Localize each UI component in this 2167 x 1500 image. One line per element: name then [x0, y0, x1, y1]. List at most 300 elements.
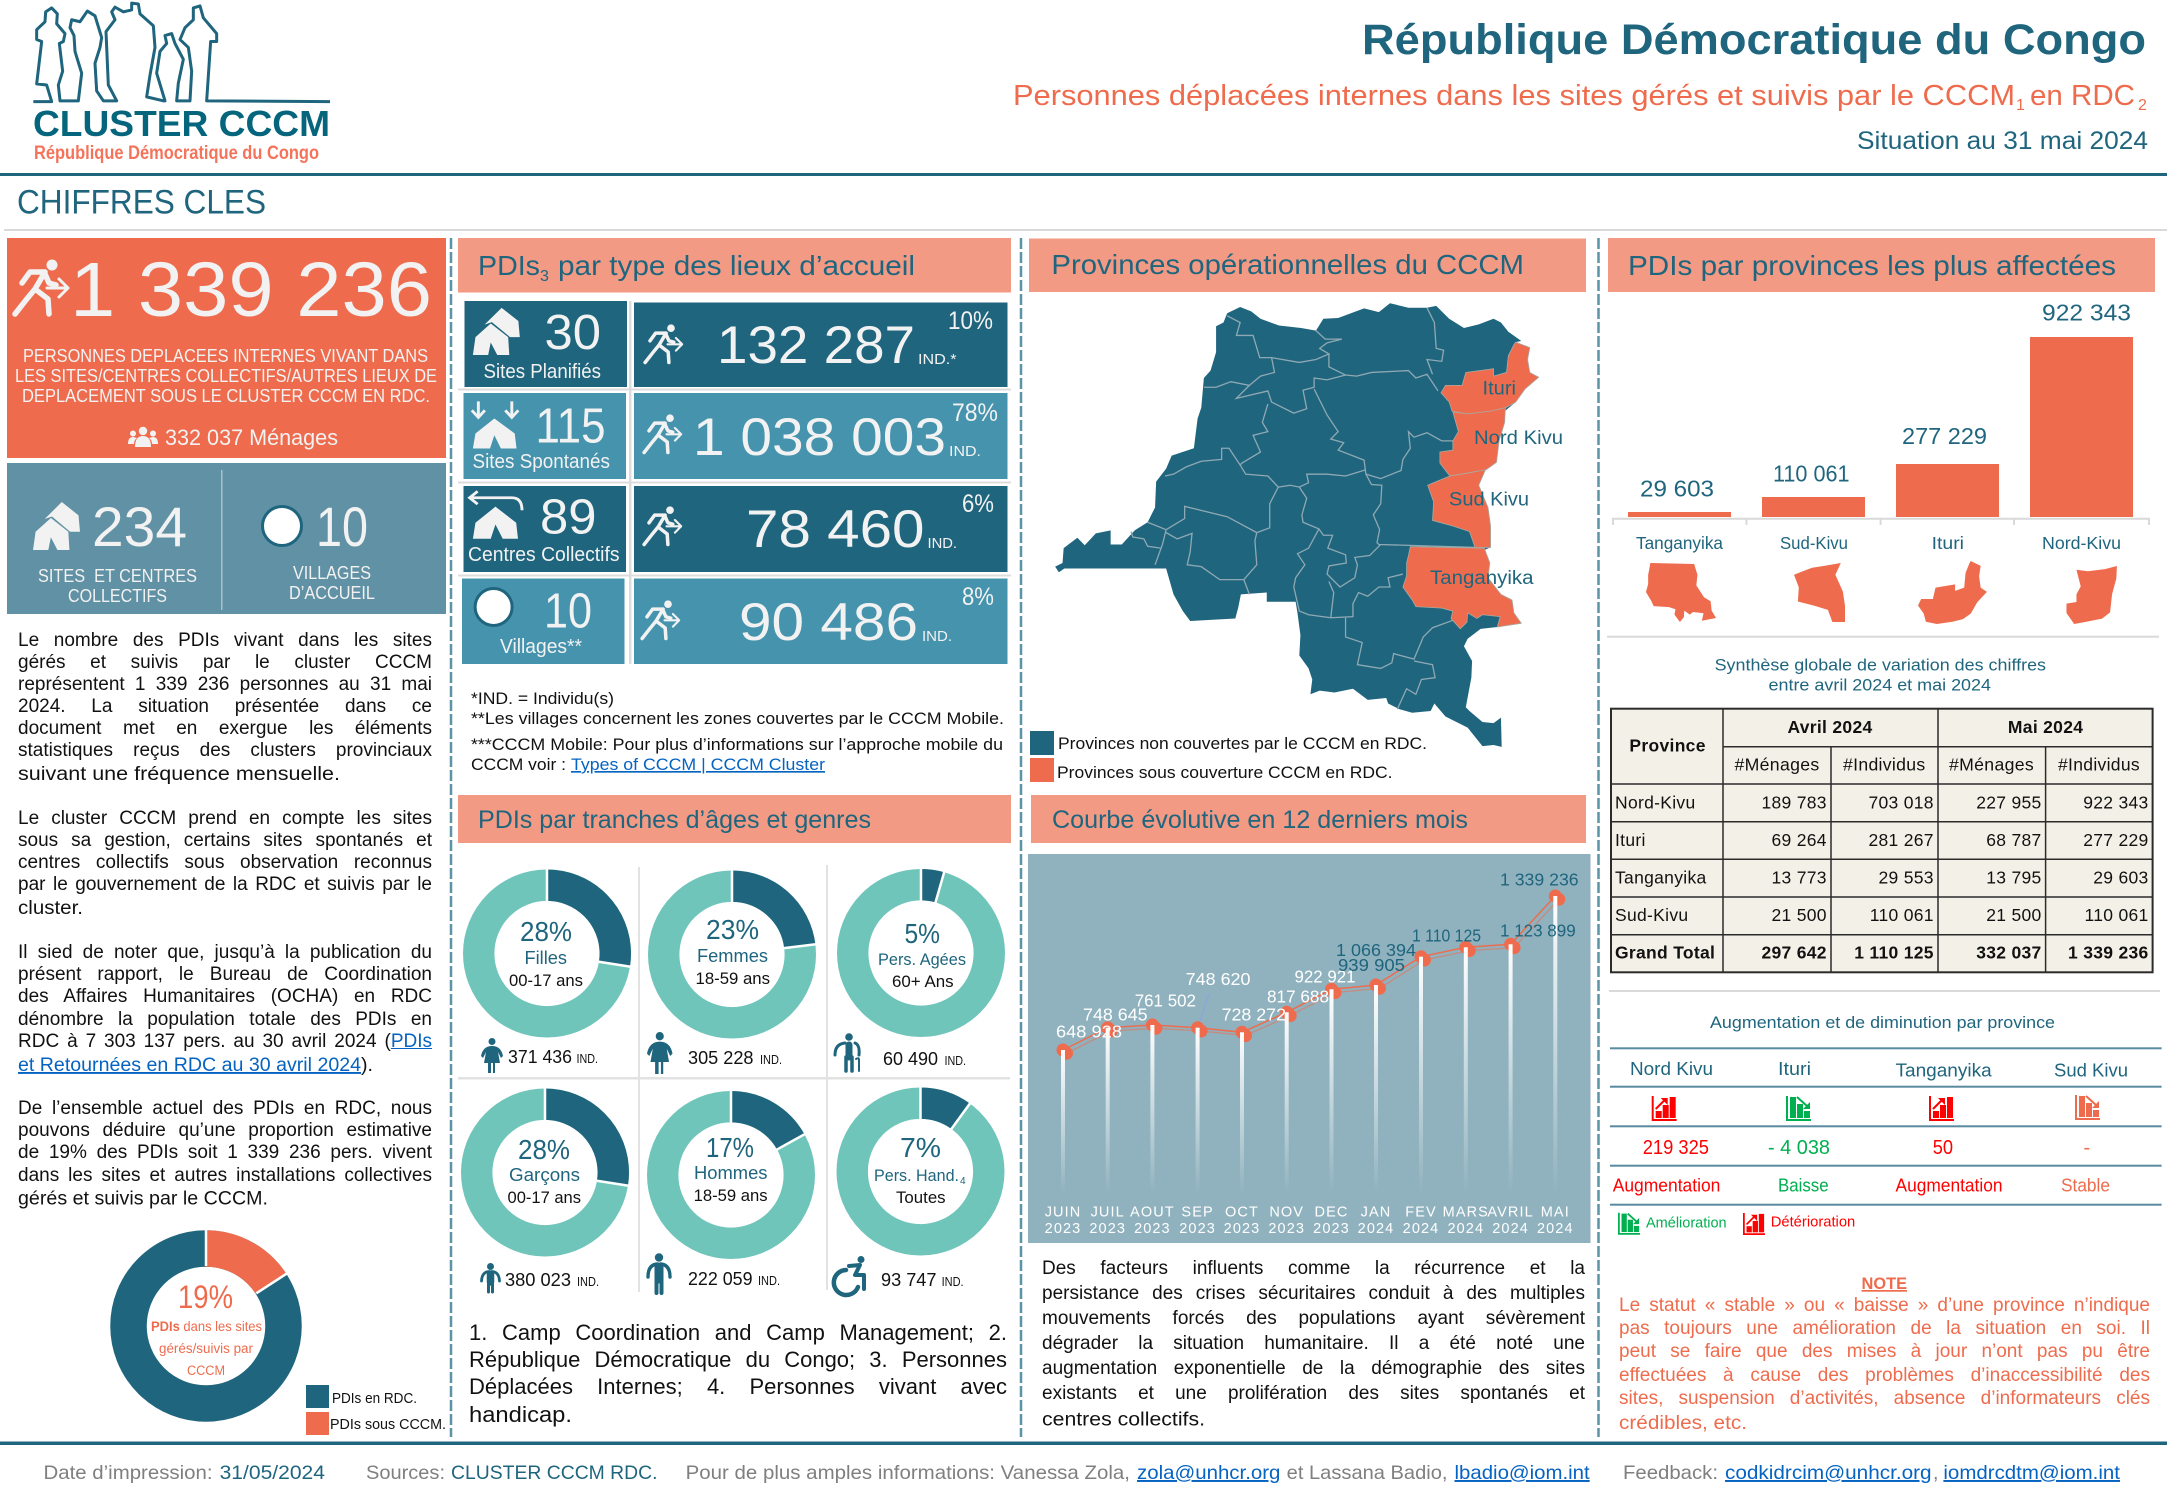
sites label: [38, 565, 197, 606]
table: variation April to May: Mai 2024: [2008, 717, 2083, 737]
footer: Feedback:: [1623, 1462, 1718, 1484]
text block: introduction: dénombre la population totale des PDIs en: [18, 1009, 432, 1030]
description: DEPLACEMENT SOUS LE CLUSTER CCCM EN RDC.: [22, 385, 430, 406]
table: variation April to May: 1 339 236: [2068, 943, 2149, 963]
panel: total displaced people: [7, 238, 446, 458]
map: DRC provinces: [1055, 303, 1539, 747]
villages label: VILLAGES: [293, 562, 371, 583]
text block: note: sites, suspension d’activités, absence d’informateurs clés: [1619, 1388, 2150, 1409]
table: variation April to May: 68 787: [1986, 830, 2042, 850]
legend: donut: PDIs sous CCCM.: [330, 1417, 446, 1433]
donut: personnes handicapees: IND.: [942, 1275, 964, 1289]
note heading: NOTE: [1862, 1274, 1907, 1293]
donut: hommes: Hommes: [694, 1163, 768, 1183]
text block: introduction: Le nombre des PDIs vivant dans les sites: [18, 630, 432, 651]
subtitle: Personnes déplacées internes dans les sites gérés et suivis par le CCCM: [1013, 80, 2015, 112]
panel: sites and villages: [7, 463, 446, 614]
text block: footnotes: handicap.: [469, 1402, 572, 1427]
donut caption: gérés/suivis par: [159, 1341, 253, 1356]
subtitle: 2: [2138, 97, 2147, 114]
heading: [458, 238, 1011, 292]
donut: hommes: 18-59 ans: [694, 1187, 768, 1205]
variation values: 219 325: [1643, 1137, 1709, 1159]
text block: notes: ***CCCM Mobile: Pour plus d’informations sur l’approche mobile du: [471, 736, 1003, 754]
data labels: 728 272: [1222, 1005, 1286, 1025]
panel: operational provinces: [1029, 238, 1586, 782]
description: LES SITES/CENTRES COLLECTIFS/AUTRES LIEUX DE: [15, 365, 437, 386]
variation values: 50: [1933, 1137, 1953, 1159]
donut: hommes: 222 059: [688, 1269, 752, 1289]
table: variation April to May: Ituri: [1615, 830, 1646, 850]
row: villages: 90 486: [739, 593, 918, 652]
legend: improvement and deterioration: Amélioration: [1646, 1215, 1727, 1232]
table: variation April to May: #Ménages: [1949, 755, 2034, 775]
text block: trend comment: dégrader la situation humanitaire. Il a été noté une: [1042, 1333, 1585, 1354]
panel: 12-month trend: [1028, 795, 1590, 1243]
text block: introduction: [18, 629, 432, 1209]
text block: introduction: Il sied de noter que, jusqu’à la publication du: [18, 942, 432, 963]
heading: [458, 795, 1011, 843]
text block: introduction: suivant une fréquence mensuelle.: [18, 764, 340, 785]
text block: introduction: des Affaires Humanitaires (OCHA) en RDC: [18, 986, 432, 1007]
text block: note: peut se faire que des mises à jour n’ont pas pu être: [1619, 1341, 2150, 1362]
variation values: [1643, 1137, 2090, 1159]
text block: trend comment: Des facteurs influents comme la récurrence et la: [1042, 1258, 1585, 1279]
icon: collective centres: [470, 491, 522, 539]
text block: introduction: gérés et suivis par le cluster CCCM: [18, 652, 432, 673]
icon: Ituri shape: [1918, 561, 1987, 624]
icon: wheelchair: [834, 1256, 864, 1295]
text block: footnotes: Déplacées Internes; 4. Personnes vivant avec: [469, 1374, 1007, 1399]
heading: Courbe évolutive en 12 derniers mois: [1052, 806, 1468, 834]
donut: personnes agees: Pers. Agées: [878, 951, 966, 969]
text block: trend comment: persistance des crises sécuritaires conduit à des multiples: [1042, 1283, 1585, 1304]
subtitle: en RDC: [2030, 80, 2135, 112]
donut: personnes handicapees: Pers. Hand.: [874, 1167, 959, 1185]
table: variation April to May: 1 110 125: [1854, 943, 1934, 963]
logo wordmark: CLUSTER CCCM: [33, 103, 330, 144]
icon: runner: [644, 414, 681, 452]
donut: femmes: 23%: [706, 914, 759, 945]
month axis: SEP: [1181, 1205, 1214, 1221]
heading: Provinces opérationnelles du CCCM: [1051, 249, 1524, 280]
status labels: Augmentation: [1896, 1176, 2002, 1196]
month axis: 2023: [1045, 1221, 1081, 1237]
logo: [33, 3, 330, 164]
row: sites spontanes: [464, 393, 1008, 479]
table: variation April to May: Tanganyika: [1615, 867, 1707, 887]
table: variation April to May: 332 037: [1976, 943, 2042, 963]
text block: introduction: et Retournées en RDC au 30 avril 2024 ).: [18, 1055, 373, 1076]
heading: PDIs par tranches d’âges et genres: [478, 806, 871, 834]
row: centres collectifs: IND.: [928, 536, 957, 552]
row: villages: 8%: [962, 583, 994, 611]
donut: personnes agees: 5%: [904, 918, 940, 949]
donut: garcons: [477, 1087, 629, 1292]
row: sites spontanes: 115: [536, 400, 606, 454]
text block: introduction: 2024. La situation présentée dans ce: [18, 696, 432, 717]
month axis: 2023: [1224, 1221, 1260, 1237]
row: sites planifies: Sites Planifiés: [484, 361, 601, 383]
table: variation April to May: 281 267: [1868, 830, 1934, 850]
data labels: 761 502: [1135, 991, 1196, 1011]
map labels: Sud Kivu: [1449, 490, 1529, 511]
donut: garcons: 380 023: [505, 1270, 571, 1290]
month axis: 2023: [1313, 1221, 1350, 1237]
row: centres collectifs: [464, 486, 1008, 572]
text block: introduction: centres collectifs sous observation reconnus: [18, 852, 432, 873]
month axis: 2024: [1447, 1221, 1484, 1237]
text block: introduction: dans les sites et autres installations collectives: [18, 1165, 432, 1186]
panel: increase and decrease by province: [1610, 1014, 2162, 1235]
footer: codkidrcim@unhcr.org: [1725, 1462, 1932, 1484]
donut: filles: 00-17 ans: [509, 972, 583, 990]
sites label: COLLECTIFS: [68, 585, 167, 606]
bar labels: Sud-Kivu: [1780, 533, 1848, 553]
month axis: 2024: [1492, 1221, 1529, 1237]
table: variation April to May: Province: [1629, 736, 1706, 756]
month axis: 2024: [1358, 1221, 1394, 1237]
villages count: 10: [316, 495, 368, 558]
row: sites planifies: 30: [544, 306, 601, 360]
description: [15, 345, 437, 406]
donut: personnes handicapees: 93 747: [881, 1270, 936, 1290]
donut: femmes: Femmes: [697, 946, 768, 966]
donut: filles: 28%: [520, 916, 572, 947]
row: centres collectifs: 89: [540, 491, 596, 545]
bar values: [1640, 300, 2131, 502]
icon: woman: [647, 1032, 673, 1074]
legend: improvement and deterioration: Détérioration: [1771, 1214, 1855, 1231]
donut: filles: 371 436: [508, 1047, 572, 1067]
table: variation April to May: 189 783: [1761, 792, 1827, 812]
data labels: 1 066 394: [1336, 940, 1416, 960]
donut: hommes: [648, 1090, 805, 1293]
footer: Pour de plus amples informations: Vanessa Zola,: [686, 1462, 1130, 1484]
sites label: SITES ET CENTRES: [38, 565, 197, 586]
icon: girl: [481, 1038, 503, 1073]
table: variation April to May: 703 018: [1868, 792, 1934, 812]
bar labels: Ituri: [1932, 533, 1964, 553]
text block: trend comment: existants et une prolifération des sites spontanés et: [1042, 1383, 1585, 1404]
province names: Sud Kivu: [2054, 1061, 2128, 1081]
bar values: 110 061: [1773, 461, 1850, 487]
data labels: 939 905: [1338, 955, 1405, 975]
table heading: entre avril 2024 et mai 2024: [1768, 677, 1991, 695]
icon: runner: [644, 506, 681, 544]
month axis: OCT: [1225, 1205, 1259, 1221]
text block: notes: Types of CCCM | CCCM Cluster: [571, 756, 826, 774]
section heading: chiffres cles: CHIFFRES CLES: [17, 184, 266, 222]
donut: personnes handicapees: 7%: [900, 1132, 941, 1163]
table: variation April to May: #Ménages: [1734, 755, 1820, 775]
text block: notes: *IND. = Individu(s): [471, 690, 614, 708]
month axis: 2023: [1268, 1221, 1305, 1237]
footer: CLUSTER CCCM RDC.: [451, 1462, 658, 1484]
footer: ,: [1933, 1462, 1938, 1484]
table: variation April to May: 29 553: [1878, 867, 1934, 887]
icon: tents: [33, 502, 80, 550]
heading: [1031, 795, 1586, 843]
map labels: Tanganyika: [1430, 568, 1534, 589]
icon: silhouettes of people: [33, 3, 330, 102]
icon: boy: [482, 1263, 500, 1292]
legend: map: Provinces non couvertes par le CCCM en RDC.: [1058, 734, 1427, 753]
logo subtitle: République Démocratique du Congo: [34, 143, 319, 164]
text block: introduction: De l’ensemble actuel des PDIs en RDC, nous: [18, 1098, 432, 1119]
donut: filles: [479, 868, 631, 1073]
text block: introduction: par le gouvernement de la RDC et suivis par le: [18, 874, 432, 895]
icon: elderly person: [835, 1033, 859, 1071]
text block: introduction: représentent 1 339 236 personnes au 31 mai: [18, 674, 432, 695]
province names: Nord Kivu: [1630, 1059, 1713, 1079]
big number: 1 339 236: [70, 247, 432, 333]
table: variation April to May: #Individus: [2058, 755, 2140, 775]
table: variation April to May: Grand Total: [1615, 943, 1715, 963]
bar labels: Nord-Kivu: [2042, 533, 2121, 553]
month axis: MAI: [1541, 1205, 1570, 1221]
icon: village circle: [262, 506, 302, 546]
text block: introduction: sous sa gestion, certains sites spontanés et: [18, 830, 432, 851]
data labels: 1 339 236: [1500, 870, 1579, 890]
text block: notes: CCCM voir :: [471, 756, 566, 774]
month axis: AVRIL: [1487, 1205, 1534, 1221]
icon: stable Sud Kivu: [2075, 1095, 2100, 1120]
map labels: Ituri: [1482, 379, 1516, 400]
table heading: Synthèse globale de variation des chiffres: [1715, 657, 2046, 675]
row: villages: IND.: [922, 629, 952, 645]
donut: femmes: IND.: [760, 1053, 782, 1067]
donut: personnes handicapees: Toutes: [896, 1189, 946, 1207]
variation values: -: [2084, 1137, 2090, 1159]
text block: introduction: présent rapport, le Bureau de Coordination: [18, 964, 432, 985]
status labels: [1613, 1176, 2110, 1196]
text block: footnotes: 1. Camp Coordination and Camp Management; 2.: [469, 1320, 1007, 1345]
donut: garcons: 28%: [518, 1134, 570, 1165]
donut: filles: Filles: [524, 948, 567, 968]
row: sites spontanes: 78%: [952, 399, 998, 427]
table: variation April to May: Avril 2024: [1787, 717, 1873, 737]
icon: spontaneous sites: [472, 401, 518, 448]
icon: increase Tanganyika: [1929, 1096, 1954, 1121]
text block: trend comment: augmentation exponentielle de la démographie des sites: [1042, 1358, 1585, 1379]
bar labels: [1636, 533, 2121, 553]
table: variation April to May: 110 061: [1870, 905, 1934, 925]
table: variation April to May: 922 343: [2083, 792, 2149, 812]
data labels: 1 123 899: [1500, 921, 1576, 941]
legend: donut: [306, 1385, 446, 1435]
text block: introduction: statistiques reçus des clusters provinciaux: [18, 740, 432, 761]
column separators: [451, 238, 1598, 1437]
status labels: Stable: [2061, 1176, 2110, 1196]
table: variation April to May: 69 264: [1771, 830, 1827, 850]
table: variation April to May: 277 229: [2083, 830, 2149, 850]
donut caption: PDIs dans les sites: [151, 1319, 262, 1334]
table: variation April to May: 110 061: [2085, 905, 2149, 925]
heading: 3: [540, 268, 549, 285]
icon: Sud-Kivu shape: [1794, 563, 1845, 622]
text block: notes: **Les villages concernent les zones couvertes par le CCCM Mobile.: [471, 710, 1004, 728]
heading: par type des lieux d’accueil: [558, 250, 915, 281]
text block: footnotes: République Démocratique du Congo; 3. Personnes: [469, 1347, 1007, 1372]
donut: personnes agees: 60 490: [883, 1049, 938, 1069]
text block: note: crédibles, etc.: [1619, 1413, 1747, 1434]
row: sites spontanes: IND.: [949, 444, 981, 460]
donut: femmes: 305 228: [688, 1048, 754, 1068]
donut: hommes: 17%: [706, 1132, 754, 1163]
villages label: D’ACCUEIL: [289, 582, 375, 603]
donut: personnes agees: 60+ Ans: [892, 973, 954, 991]
icon: man: [648, 1253, 670, 1293]
heading: PDIs: [478, 250, 540, 281]
legend: donut: PDIs en RDC.: [332, 1391, 417, 1407]
donut: femmes: 18-59 ans: [696, 970, 770, 988]
row: sites spontanes: 1 038 003: [693, 408, 946, 467]
subtitle: 1: [2016, 97, 2025, 114]
donut chart: 19 percent: [128, 1229, 287, 1404]
footer: iomdrcdtm@iom.int: [1943, 1462, 2121, 1484]
footer: Date d’impression:: [44, 1462, 212, 1484]
footer: [44, 1462, 2121, 1484]
data labels: [1056, 870, 1579, 1042]
data labels: 748 620: [1186, 969, 1251, 989]
footer: et Lassana Badio,: [1287, 1462, 1448, 1484]
status labels: Augmentation: [1613, 1176, 1720, 1196]
icon: increase Nord Kivu: [1652, 1096, 1677, 1121]
month axis: NOV: [1269, 1205, 1304, 1221]
table: variation April to May: Nord-Kivu: [1615, 792, 1696, 812]
heading: Augmentation et de diminution par province: [1710, 1014, 2055, 1032]
text block: introduction: document met en exergue les éléments: [18, 718, 432, 739]
row: sites spontanes: Sites Spontanés: [472, 451, 610, 473]
text block: introduction: pouvons déduire qu’une proportion estimative: [18, 1120, 432, 1141]
table: variation April to May: 21 500: [1986, 905, 2042, 925]
table: variation April to May: 29 603: [2093, 867, 2149, 887]
icon: planned sites: [473, 308, 520, 355]
donut value: 19%: [178, 1279, 233, 1315]
text block: trend comment: mouvements forcés des populations ayant sévèrement: [1042, 1308, 1585, 1329]
table: variation April to May: 227 955: [1976, 792, 2042, 812]
donut: femmes: [647, 869, 817, 1074]
month axis: 2023: [1089, 1221, 1126, 1237]
month axis: JAN: [1361, 1205, 1391, 1221]
heading: [1029, 238, 1586, 292]
sites count: 234: [92, 495, 187, 558]
month axis: JUIL: [1091, 1205, 1125, 1221]
heading: PDIs par provinces les plus affectées: [1628, 250, 2116, 281]
bar values: 922 343: [2042, 300, 2131, 326]
month axis: [1045, 1205, 1574, 1237]
donut: garcons: Garçons: [509, 1165, 580, 1185]
text block: introduction: de 19% des PDIs soit 1 339 236 pers. vivent: [18, 1142, 432, 1163]
text block: note: Le statut « stable » ou « baisse » d’une province n’indique: [1619, 1295, 2150, 1316]
bar labels: Tanganyika: [1636, 533, 1723, 553]
donut: personnes handicapees: 4: [960, 1176, 966, 1187]
icon: runner: [642, 600, 679, 638]
icon: Tanganyika shape: [1646, 563, 1716, 622]
villages label: [289, 562, 375, 603]
table: variation April to May: #Individus: [1843, 755, 1926, 775]
donut caption: CCCM: [187, 1363, 225, 1378]
footer: lbadio@iom.int: [1454, 1462, 1590, 1484]
legend: map: Provinces sous couverture CCCM en RDC.: [1057, 763, 1392, 782]
text block: introduction: Le cluster CCCM prend en compte les sites: [18, 808, 432, 829]
map labels: [1430, 379, 1563, 589]
table: variation April to May: 13 773: [1771, 867, 1827, 887]
donut: personnes agees: [835, 868, 989, 1071]
icon: runner: [645, 324, 682, 362]
data labels: 648 928: [1056, 1022, 1122, 1042]
row: villages: Villages**: [500, 636, 582, 658]
bar values: 277 229: [1902, 423, 1987, 449]
row: sites planifies: IND.*: [918, 352, 957, 368]
table: variation April to May: [1611, 709, 2153, 972]
panel: most affected provinces: [1608, 238, 2155, 624]
text block: note: [1619, 1294, 2150, 1434]
table: variation April to May: 21 500: [1771, 905, 1827, 925]
month axis: 2023: [1134, 1221, 1171, 1237]
row: centres collectifs: 6%: [962, 490, 994, 518]
panel: age and gender: [458, 795, 1011, 1295]
footer: 31/05/2024: [220, 1462, 325, 1484]
province names: [1630, 1059, 2128, 1081]
heading: [1608, 238, 2155, 292]
panel: PDIs by type of host location: [458, 238, 1011, 664]
text block: note: pas toujours une amélioration de la situation en soi. Il: [1619, 1318, 2150, 1339]
donut: hommes: IND.: [758, 1274, 780, 1288]
icon: households: [128, 427, 158, 447]
icon: Nord-Kivu shape: [2066, 566, 2117, 624]
month axis: 2024: [1403, 1221, 1439, 1237]
variation values: - 4 038: [1768, 1137, 1830, 1159]
text block: note: effectuées à cause des problèmes d’inaccessibilité des: [1619, 1365, 2150, 1386]
line chart: [1028, 854, 1590, 1243]
text block: trend comment: centres collectifs.: [1042, 1410, 1205, 1431]
row: sites planifies: 10%: [948, 307, 993, 335]
legend: improvement and deterioration: [1618, 1213, 1855, 1235]
month axis: 2024: [1537, 1221, 1574, 1237]
month axis: JUIN: [1045, 1205, 1081, 1221]
text block: notes: [471, 690, 1004, 774]
icon: village circle: [475, 588, 512, 626]
footer: zola@unhcr.org: [1137, 1462, 1280, 1484]
donut: personnes handicapees: [834, 1086, 989, 1295]
legend: map: [1030, 731, 1427, 782]
donut: garcons: IND.: [577, 1275, 599, 1289]
province names: Tanganyika: [1896, 1061, 1993, 1081]
icon: runner: [15, 260, 68, 314]
date of situation: Situation au 31 mai 2024: [1857, 127, 2148, 155]
data labels: 748 645: [1083, 1005, 1148, 1025]
icon: decrease Ituri: [1786, 1096, 1811, 1121]
status labels: Baisse: [1778, 1176, 1829, 1196]
table: variation April to May: 13 795: [1986, 867, 2042, 887]
text block: footnotes: [469, 1319, 1007, 1427]
row: villages: 10: [544, 584, 592, 638]
month axis: FEV: [1405, 1205, 1437, 1221]
text block: introduction: RDC à 7 303 137 pers. au 30 avril 2024 (PDIs: [18, 1031, 432, 1052]
month axis: MARS: [1443, 1205, 1489, 1221]
text block: trend comment: [1042, 1257, 1585, 1431]
donut: filles: IND.: [576, 1052, 598, 1066]
data labels: 817 688: [1267, 987, 1329, 1007]
table heading: [1715, 657, 2046, 695]
data labels: 922 921: [1294, 967, 1356, 987]
month axis: AOUT: [1130, 1205, 1175, 1221]
row: sites planifies: 132 287: [717, 316, 915, 375]
map labels: Nord Kivu: [1474, 428, 1563, 449]
bar values: 29 603: [1640, 476, 1714, 502]
